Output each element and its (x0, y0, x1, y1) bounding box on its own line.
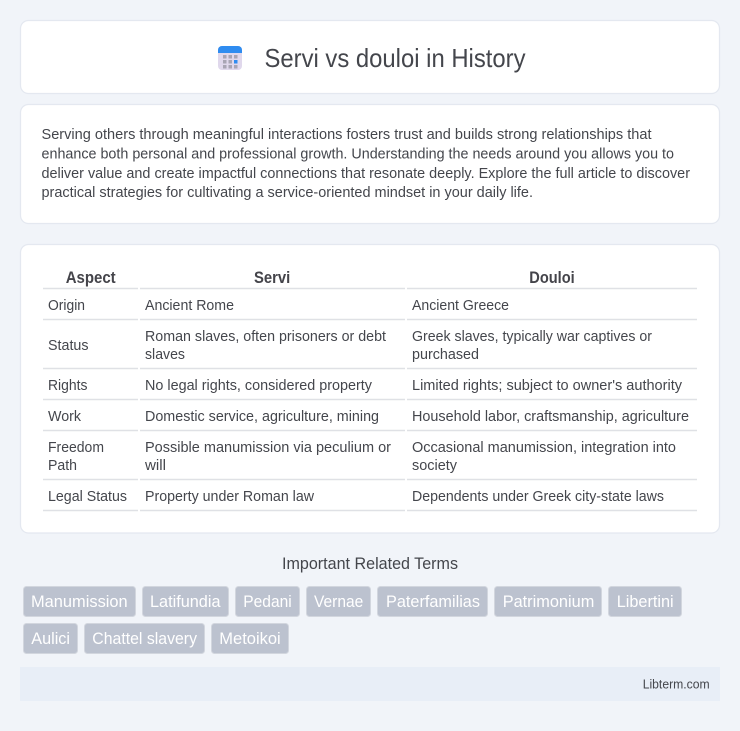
heading: related terms: Important Related Terms (282, 555, 458, 573)
tag: Paterfamilias (378, 586, 488, 616)
row: status (43, 329, 697, 368)
table header row: Douloi (529, 269, 575, 287)
row: status: Status (48, 338, 88, 354)
footer (20, 667, 720, 701)
intro paragraph: Serving others through meaningful interactions fosters trust and builds strong relationships that (42, 127, 652, 143)
panel: intro text (20, 104, 720, 224)
row: legal status: Property under Roman law (145, 489, 314, 505)
intro paragraph: deliver value and create impactful connections that resonate deeply. Explore the full article to discover (42, 166, 690, 182)
row: freedom path: society (412, 458, 458, 474)
row: origin (43, 298, 697, 320)
row: rights: Limited rights; subject to owner's authority (412, 378, 683, 394)
row: freedom path: Possible manumission via peculium or (145, 440, 391, 456)
row: work (43, 409, 697, 430)
tag: Vernae: Vernae (314, 592, 363, 611)
footer credit: Libterm.com (643, 678, 710, 692)
tag: Chattel slavery: Chattel slavery (92, 629, 198, 648)
tag: Chattel slavery (84, 624, 204, 654)
row: rights: No legal rights, considered property (145, 378, 373, 394)
tag: Latifundia: Latifundia (150, 592, 221, 611)
row: work: Domestic service, agriculture, mining (145, 409, 379, 425)
tag: Paterfamilias: Paterfamilias (386, 592, 480, 611)
row: work: Household labor, craftsmanship, agriculture (412, 409, 689, 425)
row: origin: Ancient Rome (145, 298, 234, 314)
panel: comparison table (20, 244, 720, 533)
row: freedom path (43, 440, 697, 480)
row: rights (43, 378, 697, 400)
intro paragraph: enhance both personal and professional growth. Understanding the needs around you allows you to (42, 146, 674, 162)
row: rights: Rights (48, 378, 88, 394)
row: origin: Origin (48, 298, 85, 314)
row: freedom path: will (144, 458, 166, 474)
row: legal status (43, 489, 697, 510)
title: Servi vs douloi in History (264, 43, 526, 73)
tag: Aulici (24, 624, 78, 654)
row: origin: Ancient Greece (412, 298, 509, 314)
tag: Aulici: Aulici (31, 629, 70, 648)
tag: Libertini (608, 586, 682, 616)
row: freedom path: Path (48, 458, 77, 474)
tag: Metoikoi: Metoikoi (219, 629, 281, 648)
tag: Metoikoi (212, 624, 288, 654)
tag: Libertini: Libertini (617, 592, 674, 611)
row: status: slaves (145, 347, 185, 363)
tag: Latifundia (142, 586, 228, 616)
tags: related terms (24, 586, 682, 654)
row: work: Work (48, 409, 82, 425)
intro paragraph (42, 127, 690, 201)
table header row: Servi (254, 269, 290, 287)
tag: Pedani (236, 586, 300, 616)
tag: Patrimonium (494, 586, 602, 616)
row: freedom path: Occasional manumission, integration into (412, 440, 676, 456)
tag: Manumission: Manumission (31, 592, 128, 611)
panel: header (20, 20, 720, 94)
intro paragraph: practical strategies for cultivating a service-oriented mindset in your daily life. (42, 185, 533, 201)
tag: Manumission (24, 586, 136, 616)
icon: calendar (218, 46, 242, 70)
table header row: Aspect (66, 269, 116, 287)
tag: Pedani: Pedani (243, 592, 292, 611)
table header row (43, 269, 697, 288)
row: legal status: Legal Status (48, 489, 127, 505)
row: status: Greek slaves, typically war captives or (412, 329, 652, 345)
tag: Patrimonium: Patrimonium (503, 592, 594, 611)
row: status: purchased (412, 347, 479, 363)
row: freedom path: Freedom (48, 440, 104, 456)
row: legal status: Dependents under Greek city-state laws (412, 489, 664, 505)
tag: Vernae (306, 586, 370, 616)
row: status: Roman slaves, often prisoners or debt (145, 329, 386, 345)
